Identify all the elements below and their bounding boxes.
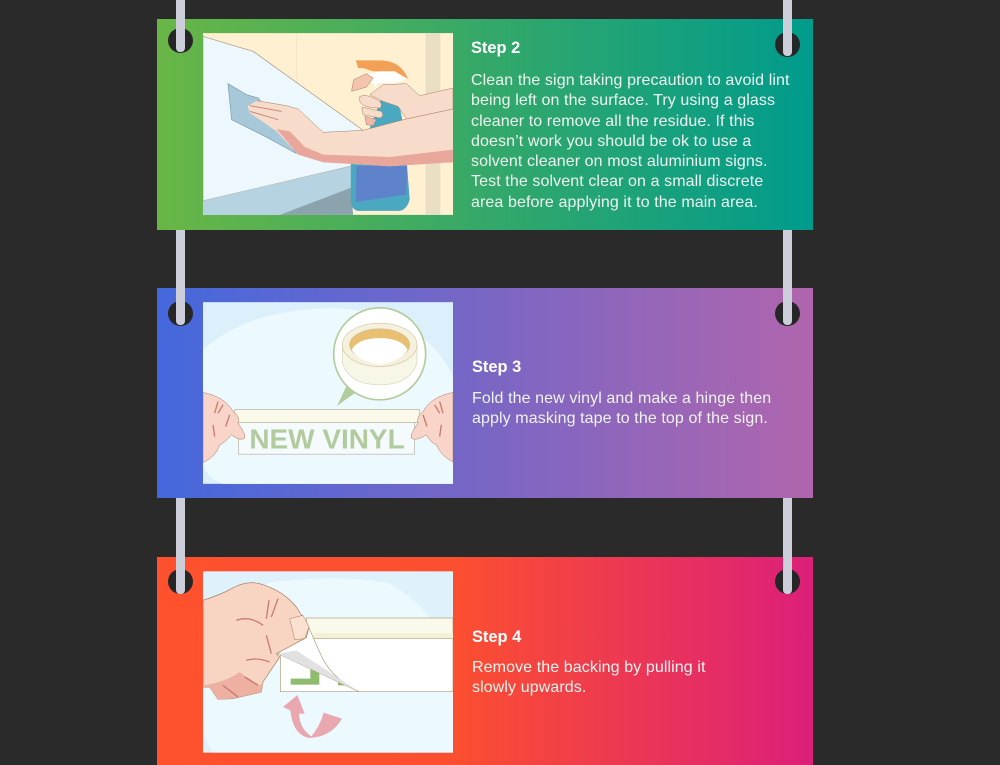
- heading: step 4: Step 4: [472, 628, 521, 646]
- text: step 2 body: Test the solvent clear on a small discrete: [471, 173, 763, 190]
- hole right: [775, 569, 800, 594]
- panel: step 4: [157, 557, 813, 765]
- strap: step 4 left hanger: [176, 557, 185, 594]
- text: step 4 body: slowly upwards.: [472, 679, 586, 696]
- text: step 4 body: Remove the backing by pulling it: [472, 659, 706, 676]
- heading: step 3: Step 3: [472, 358, 521, 376]
- strap: upper right top: [783, 230, 792, 290]
- text: step 2 body: cleaner to remove all the residue. If this: [471, 113, 754, 130]
- strap: step 4 right hanger: [783, 557, 792, 594]
- text: step 3 body: Fold the new vinyl and make a hinge then: [472, 390, 771, 407]
- text: step 3 body: [472, 390, 771, 427]
- panel: step 3: [157, 288, 813, 498]
- strap: middle right: [783, 498, 792, 558]
- text: step 2 body: solvent cleaner on most aluminium signs.: [471, 153, 768, 170]
- illustration: hand peeling backing from vinyl with arrow: [203, 571, 453, 753]
- heading: step 2: Step 2: [471, 39, 520, 57]
- hole left: [168, 301, 193, 326]
- strap: step 3 right hanger: [783, 288, 792, 325]
- text: step 4 body: [472, 659, 706, 696]
- illustration: new vinyl held by two hands with masking tape: NEW VINYL: [249, 424, 405, 454]
- strap: step 2 left hanger: [176, 0, 185, 52]
- hole right: [775, 301, 800, 326]
- illustration: hand wiping sign with cloth, spray bottle: [203, 33, 453, 215]
- text: step 2 body: being left on the surface. Try using a glass: [471, 92, 775, 109]
- strap: middle left: [176, 498, 185, 558]
- strap: step 3 left hanger: [176, 288, 185, 325]
- strap: step 2 right hanger: [783, 0, 792, 56]
- hole right: [775, 32, 800, 57]
- text: step 2 body: doesn’t work you should be ok to use a: [471, 133, 751, 150]
- text: step 2 body: Clean the sign taking precaution to avoid lint: [471, 72, 790, 89]
- panel: step 2: [157, 19, 813, 230]
- text: step 3 body: apply masking tape to the top of the sign.: [472, 410, 768, 427]
- text: step 2 body: area before applying it to the main area.: [471, 194, 758, 211]
- text: step 2 body: [471, 72, 790, 211]
- hole left: [168, 28, 193, 53]
- strap: upper left top: [176, 230, 185, 290]
- hole left: [168, 569, 193, 594]
- illustration: new vinyl held by two hands with masking tape: [203, 302, 453, 484]
